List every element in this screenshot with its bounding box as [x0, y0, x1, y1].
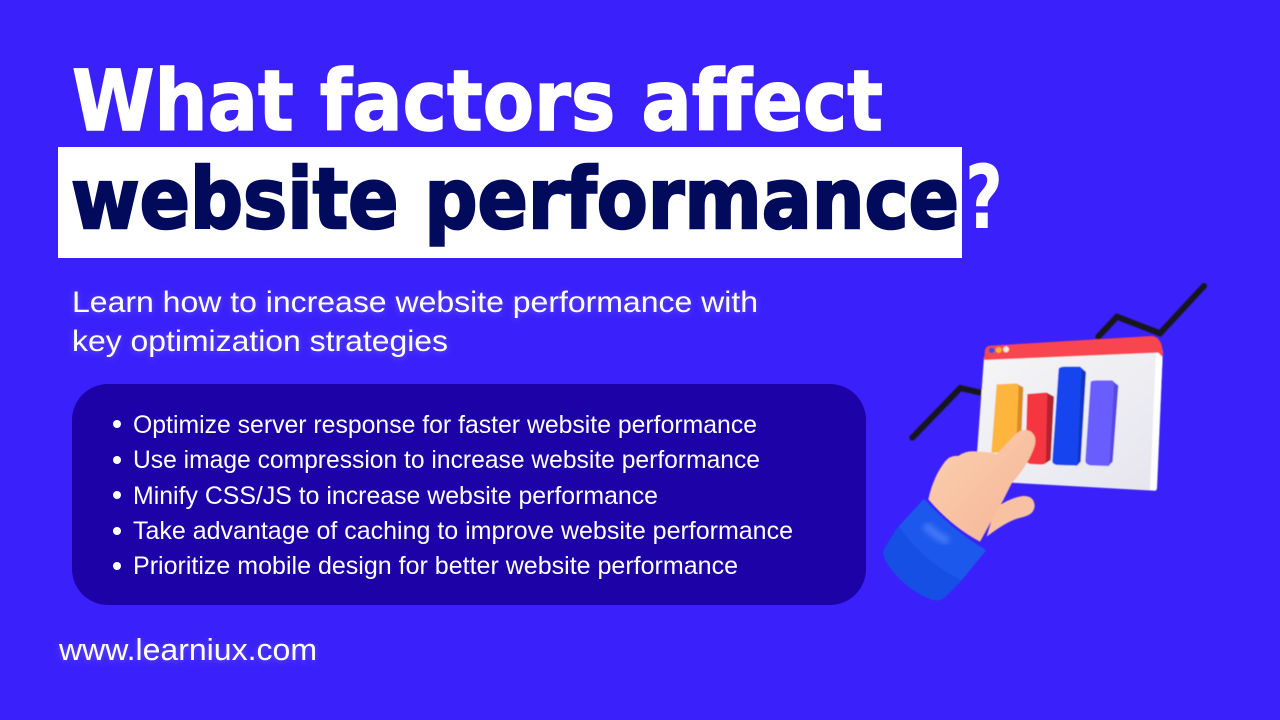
highlight box: [58, 147, 962, 258]
tips list: Take advantage of caching to improve website performance: [133, 517, 793, 545]
highlighted title line: [58, 147, 962, 258]
panel: optimization tips: [72, 384, 866, 605]
tips list: [113, 411, 793, 580]
window title bar: [984, 336, 1163, 360]
window buttons: [989, 347, 995, 353]
tips list: Use image compression to increase website performance: [133, 446, 760, 474]
bar: orange: [1012, 383, 1023, 453]
bar: blue: [1077, 367, 1086, 466]
tips list: Prioritize mobile design for better website performance: [133, 552, 738, 580]
tips list: Minify CSS/JS to increase website performance: [133, 482, 658, 510]
illustration: hand pointing at chart window: [885, 286, 1204, 599]
browser window: [975, 336, 1163, 491]
thumb: [987, 496, 1035, 537]
subtitle: [72, 286, 758, 358]
hand: [928, 430, 1035, 542]
bar: red: [1043, 393, 1054, 465]
website url: www.learniux.com: [58, 632, 317, 667]
trend line: [912, 286, 1204, 438]
title line one: What factors affect: [72, 52, 883, 150]
subtitle: key optimization strategies: [72, 325, 448, 358]
palm and index finger: [928, 430, 1035, 542]
bar: violet: [1108, 380, 1118, 466]
bar chart: [991, 367, 1118, 466]
title line two: website performance: [71, 150, 959, 248]
sleeve: [885, 502, 983, 599]
subtitle: Learn how to increase website performance with: [72, 286, 758, 319]
question mark: ?: [965, 146, 1003, 249]
tips list: Optimize server response for faster website performance: [133, 411, 757, 439]
